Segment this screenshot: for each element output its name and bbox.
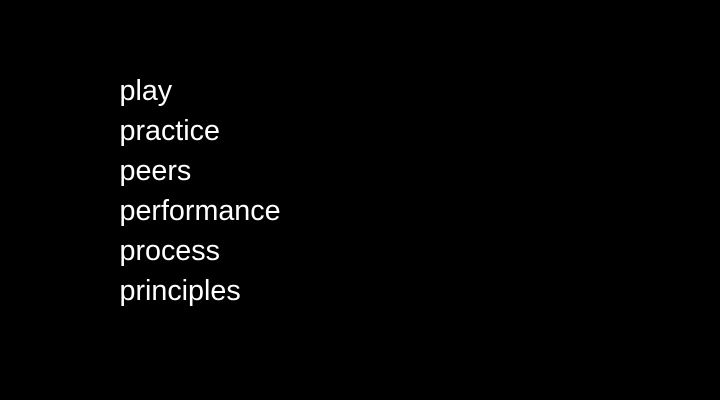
list item: peers: peers — [120, 155, 191, 187]
list item: play: play — [120, 75, 172, 107]
text block: word list — [120, 75, 281, 307]
list item: performance: performance — [120, 195, 281, 227]
list item: practice: practice — [120, 115, 220, 147]
list item: principles: principles — [120, 275, 241, 307]
list item: process: process — [120, 235, 220, 267]
